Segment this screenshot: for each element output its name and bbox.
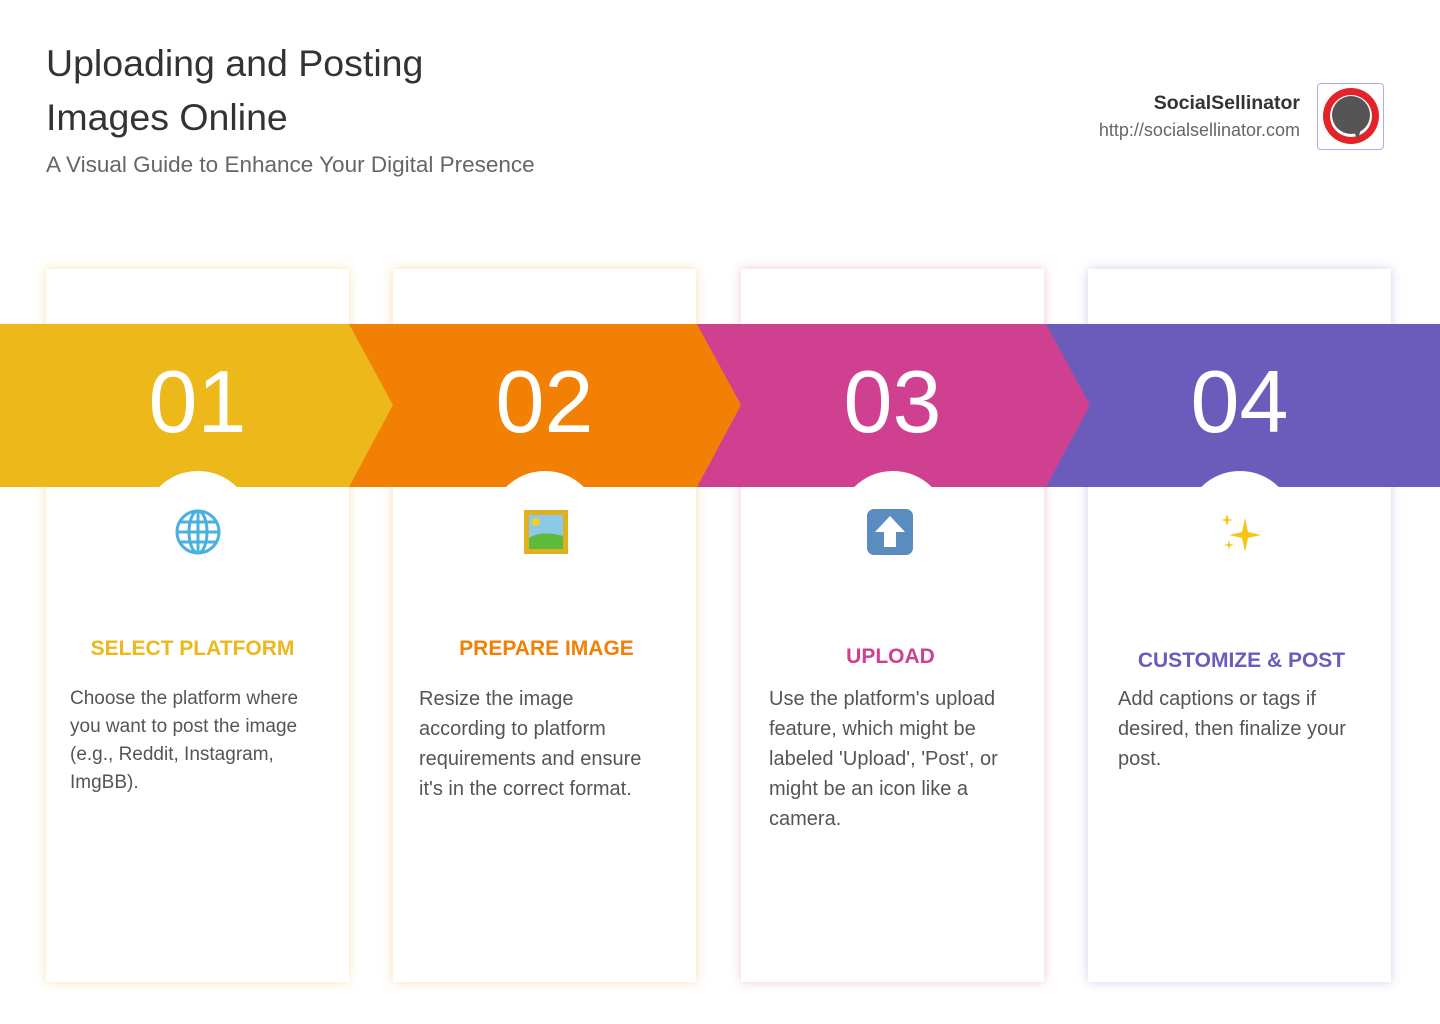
brand block bbox=[1099, 83, 1384, 150]
subtitle: A Visual Guide to Enhance Your Digital Presence bbox=[46, 152, 535, 177]
card 4 bbox=[1088, 269, 1391, 982]
step 3 text: Use the platform's upload feature, which might be labeled 'Upload', 'Post', or might be an icon like a camera. bbox=[769, 688, 998, 830]
icon: globe bbox=[176, 510, 220, 554]
icon: up arrow bbox=[867, 509, 913, 555]
title bbox=[46, 42, 423, 138]
icon: sparkles bbox=[1221, 514, 1261, 552]
text: 02 bbox=[496, 352, 593, 451]
title: Uploading and Posting bbox=[46, 42, 423, 84]
step 4 text: Add captions or tags if desired, then finalize your post. bbox=[1118, 688, 1346, 770]
brand block: SocialSellinator bbox=[1154, 92, 1300, 114]
card 2 bbox=[393, 269, 696, 982]
step 4 title: CUSTOMIZE & POST bbox=[1138, 649, 1345, 672]
step 2 title: PREPARE IMAGE bbox=[459, 637, 634, 660]
step 1 title: SELECT PLATFORM bbox=[91, 637, 294, 660]
step 2 text: Resize the image according to platform requirements and ensure it's in the correct format. bbox=[419, 688, 641, 800]
arrow band bbox=[0, 324, 1440, 487]
numbers: 01 bbox=[149, 352, 246, 451]
icon: framed picture bbox=[524, 510, 568, 554]
title: Images Online bbox=[46, 96, 288, 138]
step 3 title: UPLOAD bbox=[846, 645, 935, 668]
brand block: http://socialsellinator.com bbox=[1099, 120, 1300, 140]
step 1 text: Choose the platform where you want to post the image (e.g., Reddit, Instagram, ImgBB). bbox=[70, 688, 298, 793]
card 1 bbox=[46, 269, 349, 982]
text: 03 bbox=[844, 352, 941, 451]
text: 04 bbox=[1191, 352, 1288, 451]
card 3 bbox=[741, 269, 1044, 982]
logo bbox=[1317, 83, 1384, 150]
